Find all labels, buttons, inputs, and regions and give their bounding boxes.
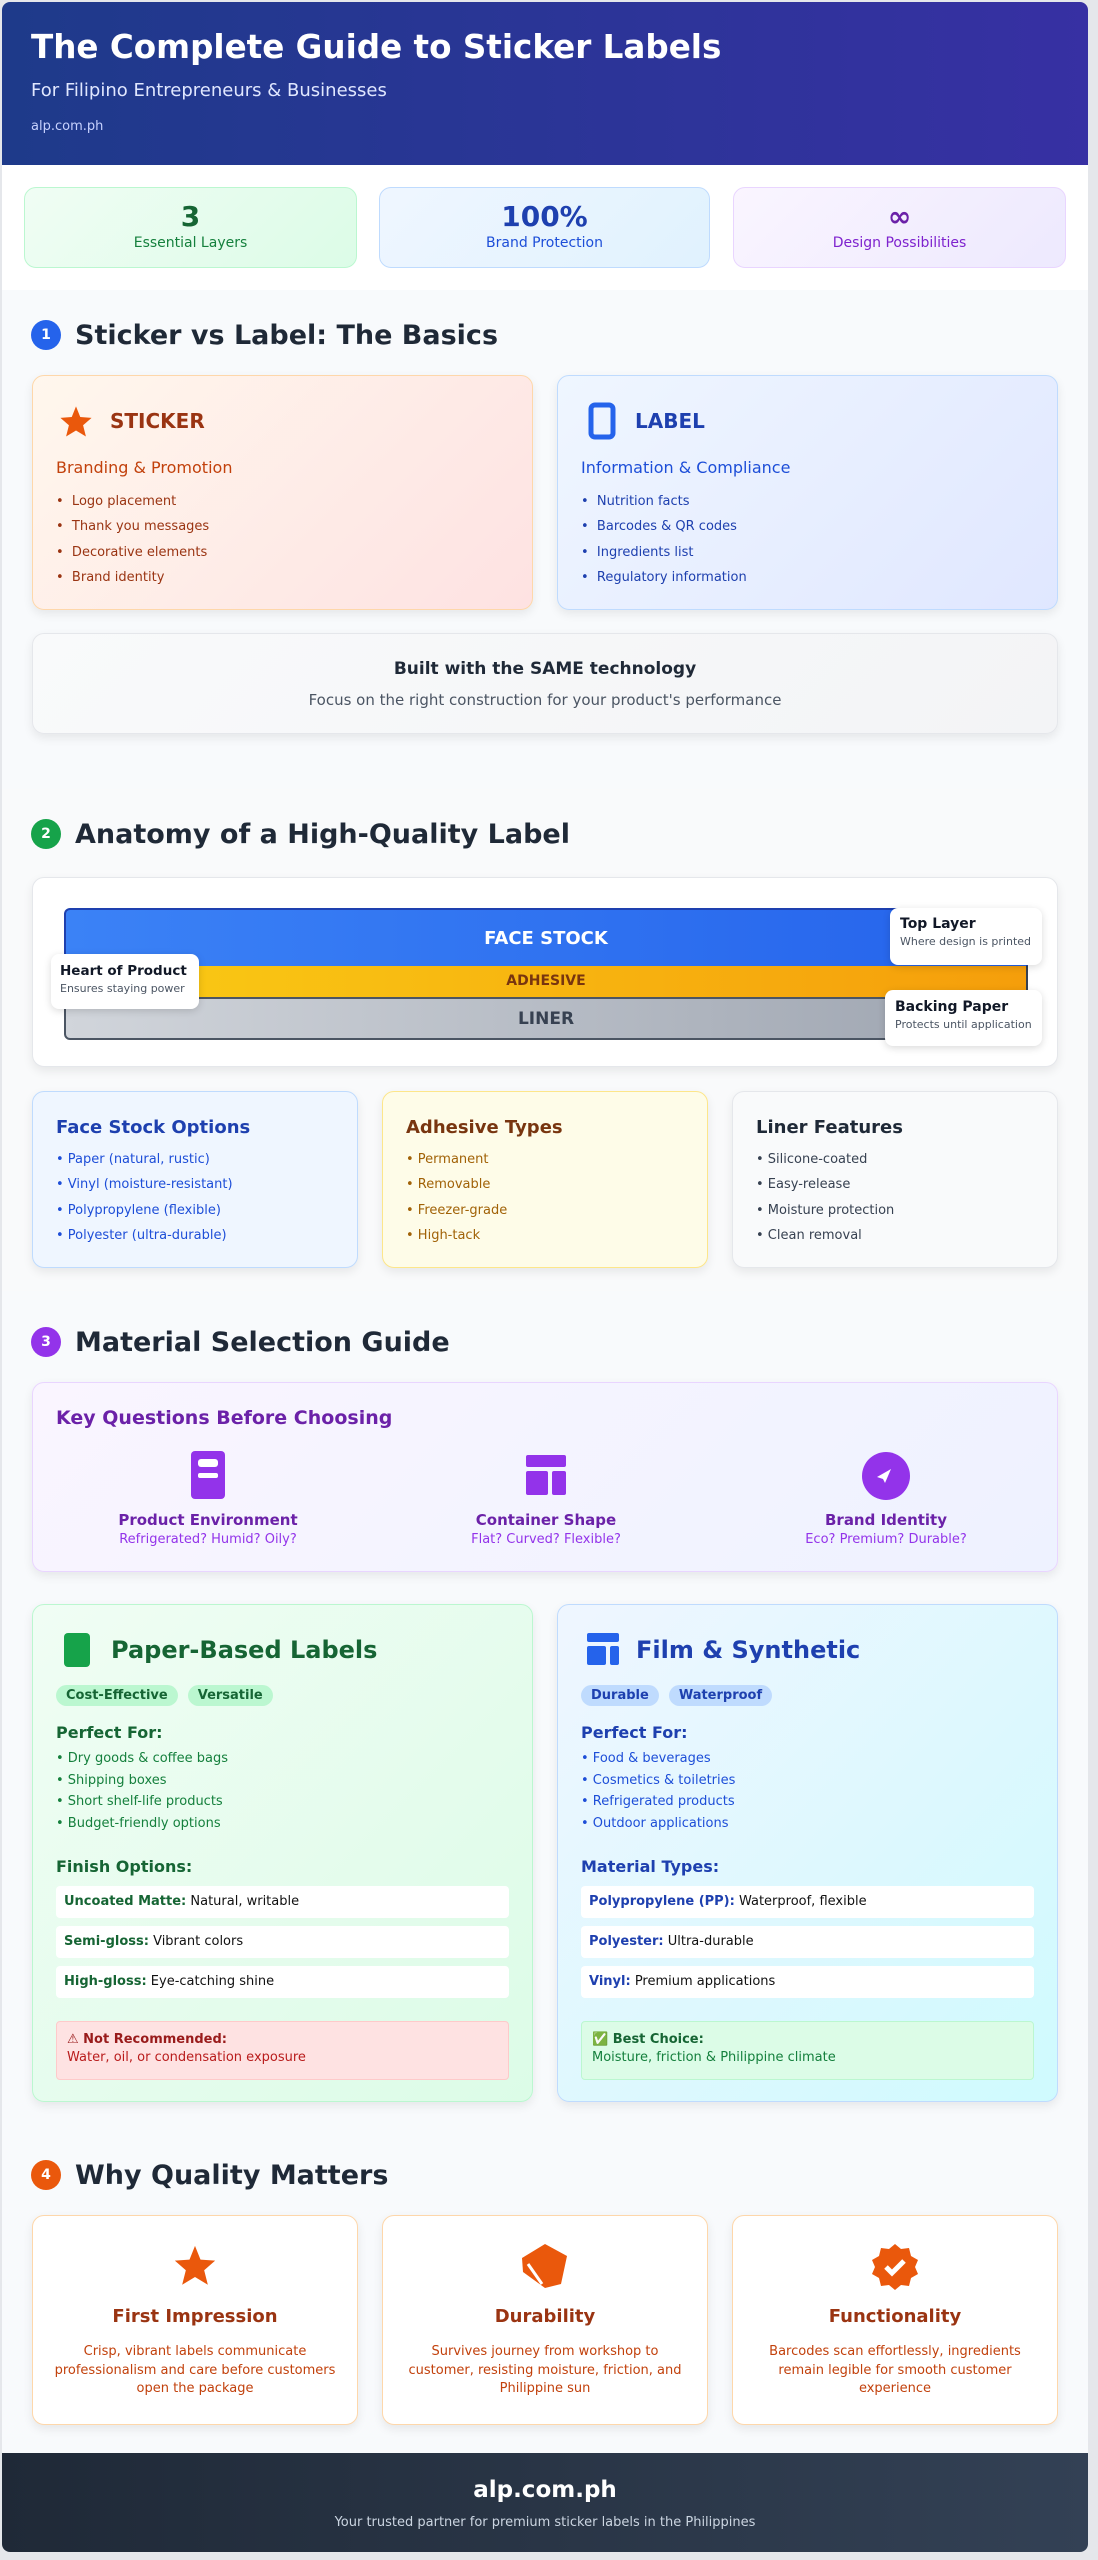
header	[2, 2, 1088, 165]
panel: functionality: Functionality	[829, 2306, 961, 2327]
panel: film & synthetic: • Cosmetics & toiletries	[581, 1773, 735, 1788]
panel: film & synthetic: Vinyl: Premium applications	[589, 1974, 775, 1989]
stat: brand protection: 100%	[501, 200, 588, 233]
panel: label	[557, 375, 1058, 610]
callout: same technology	[32, 633, 1058, 734]
panel: key questions: Key Questions Before Choosing	[56, 1407, 392, 1429]
panel: paper-based labels: Perfect For:	[56, 1723, 163, 1742]
callout: same technology: Built with the SAME technology	[394, 659, 696, 679]
stat: brand protection: Brand Protection	[486, 235, 603, 251]
section 1 heading: Sticker vs Label: The Basics	[75, 320, 498, 350]
panel: first impression: First Impression	[112, 2306, 278, 2327]
stats strip	[2, 165, 1088, 290]
section 2 band	[2, 789, 1088, 1291]
panel: film & synthetic: • Food & beverages	[581, 1751, 711, 1766]
callout: best choice: Moisture, friction & Philippine climate	[592, 2050, 836, 2065]
footer: Your trusted partner for premium sticker labels in the Philippines	[335, 2515, 755, 2530]
panel: face stock options: Face Stock Options	[56, 1117, 250, 1138]
panel: paper-based labels: High-gloss: Eye-catching shine	[64, 1974, 274, 1989]
callout: heart of product: Ensures staying power	[60, 982, 185, 995]
panel: paper-based labels: Semi-gloss: Vibrant colors	[64, 1934, 243, 1949]
item: brand identity	[805, 1452, 967, 1547]
panel: film & synthetic	[557, 1604, 1058, 2102]
panel: key questions	[32, 1382, 1058, 1572]
panel: sticker: • Thank you messages	[56, 519, 209, 534]
panel: durability: Durability	[495, 2306, 595, 2327]
panel: durability	[382, 2215, 708, 2425]
panel: paper-based labels: Cost-Effective	[66, 1688, 168, 1703]
panel: label: • Ingredients list	[581, 545, 694, 560]
panel: paper-based labels: Paper-Based Labels	[111, 1636, 377, 1664]
panel: first impression	[32, 2215, 358, 2425]
subtitle: For Filipino Entrepreneurs & Businesses	[31, 80, 387, 101]
item: container shape	[471, 1455, 621, 1547]
panel: film & synthetic: Polypropylene (PP): Waterproof, flexible	[589, 1894, 867, 1909]
item: brand identity: Brand Identity	[825, 1511, 947, 1529]
panel: label: • Barcodes & QR codes	[581, 519, 737, 534]
section 2 heading: Anatomy of a High-Quality Label	[75, 818, 570, 850]
stat: design: Design Possibilities	[833, 235, 966, 251]
panel: liner features: • Clean removal	[756, 1228, 862, 1243]
panel: paper-based labels: • Shipping boxes	[56, 1773, 167, 1788]
panel: adhesive types	[382, 1091, 708, 1268]
panel: face stock options	[32, 1091, 358, 1268]
title: The Complete Guide to Sticker Labels	[31, 28, 721, 66]
panel: paper-based labels	[32, 1604, 533, 2102]
panel: paper-based labels: • Budget-friendly options	[56, 1816, 221, 1831]
callout: top layer: Top Layer	[900, 916, 976, 932]
panel: liner features: • Silicone-coated	[756, 1152, 867, 1167]
panel: film & synthetic: Material Types:	[581, 1857, 719, 1876]
callout: best choice	[581, 2021, 1034, 2080]
layer: adhesive: ADHESIVE	[506, 973, 586, 989]
item: product environment	[118, 1451, 298, 1547]
panel: sticker: • Decorative elements	[56, 545, 207, 560]
panel: durability: Survives journey from workshop to customer, resisting moisture, friction, and Philippine sun	[408, 2344, 682, 2396]
footer	[2, 2453, 1088, 2552]
panel: paper-based labels: Versatile	[198, 1688, 263, 1703]
panel: film & synthetic: Film & Synthetic	[636, 1636, 860, 1664]
section 3 heading: Material Selection Guide	[75, 1326, 450, 1358]
panel: anatomy diagram	[32, 877, 1058, 1067]
domain: alp.com.ph	[31, 119, 103, 134]
panel: label: • Nutrition facts	[581, 494, 690, 509]
callout: backing paper	[885, 990, 1042, 1046]
section 2 heading: 2	[41, 826, 51, 842]
layer: face stock	[64, 908, 1028, 966]
panel: functionality	[732, 2215, 1058, 2425]
layer: liner: LINER	[518, 1009, 574, 1029]
callout: best choice: ✅ Best Choice:	[592, 2032, 704, 2047]
panel: sticker: Branding & Promotion	[56, 458, 232, 477]
panel: sticker: • Logo placement	[56, 494, 176, 509]
panel: face stock options: • Vinyl (moisture-resistant)	[56, 1177, 233, 1192]
panel: face stock options: • Polyester (ultra-durable)	[56, 1228, 227, 1243]
panel: label: Information & Compliance	[581, 458, 790, 477]
panel: film & synthetic: Polyester: Ultra-durable	[589, 1934, 754, 1949]
stat: layers: 3	[181, 200, 200, 233]
panel: liner features	[732, 1091, 1058, 1268]
section 3 heading: 3	[41, 1334, 51, 1350]
panel: adhesive types: • Removable	[406, 1177, 490, 1192]
panel: paper-based labels: Uncoated Matte: Natural, writable	[64, 1894, 299, 1909]
panel: sticker: STICKER	[110, 409, 205, 433]
panel: face stock options: • Paper (natural, rustic)	[56, 1152, 210, 1167]
stat: design	[733, 187, 1066, 268]
panel: label: LABEL	[635, 409, 705, 433]
panel: sticker	[32, 375, 533, 610]
section 1 heading: 1	[41, 327, 51, 343]
stat: brand protection	[379, 187, 710, 268]
callout: heart of product	[51, 954, 199, 1009]
panel: adhesive types: Adhesive Types	[406, 1117, 563, 1138]
stat: design: ∞	[888, 200, 911, 233]
panel: functionality: Barcodes scan effortlessly, ingredients remain legible for smooth customer experience	[769, 2344, 1021, 2396]
panel: liner features: • Easy-release	[756, 1177, 850, 1192]
panel: adhesive types: • Permanent	[406, 1152, 488, 1167]
footer: alp.com.ph	[473, 2477, 617, 2503]
callout: backing paper: Protects until application	[895, 1018, 1032, 1031]
panel: film & synthetic: Durable	[591, 1688, 649, 1703]
callout: same technology: Focus on the right construction for your product's performance	[309, 691, 781, 709]
stat: layers	[24, 187, 357, 268]
layer: liner	[64, 997, 1028, 1040]
panel: film & synthetic: Perfect For:	[581, 1723, 688, 1742]
panel: paper-based labels: Finish Options:	[56, 1857, 192, 1876]
callout: heart of product: Heart of Product	[60, 963, 187, 979]
panel: liner features: • Moisture protection	[756, 1203, 894, 1218]
callout: not recommended: ⚠ Not Recommended:	[67, 2032, 227, 2047]
icon: star	[60, 406, 92, 436]
panel: label: • Regulatory information	[581, 570, 747, 585]
panel: film & synthetic: Waterproof	[679, 1688, 762, 1703]
icon: layout	[587, 1633, 619, 1665]
callout: backing paper: Backing Paper	[895, 999, 1008, 1015]
callout: top layer	[890, 908, 1042, 965]
layer: face stock: FACE STOCK	[484, 928, 608, 949]
callout: top layer: Where design is printed	[900, 935, 1031, 948]
callout: not recommended	[56, 2021, 509, 2080]
item: container shape: Flat? Curved? Flexible?	[471, 1532, 621, 1547]
panel: film & synthetic: • Refrigerated products	[581, 1794, 735, 1809]
panel: face stock options: • Polypropylene (flexible)	[56, 1203, 221, 1218]
item: product environment: Product Environment	[118, 1511, 298, 1529]
layer: adhesive	[64, 966, 1028, 997]
panel: liner features: Liner Features	[756, 1117, 903, 1138]
panel: first impression: Crisp, vibrant labels communicate professionalism and care before customers open the package	[55, 2344, 335, 2396]
item: product environment: Refrigerated? Humid? Oily?	[119, 1532, 297, 1547]
callout: not recommended: Water, oil, or condensation exposure	[67, 2050, 306, 2065]
panel: paper-based labels: • Short shelf-life products	[56, 1794, 223, 1809]
panel: film & synthetic: • Outdoor applications	[581, 1816, 728, 1831]
item: brand identity: Eco? Premium? Durable?	[805, 1532, 967, 1547]
panel: sticker: • Brand identity	[56, 570, 164, 585]
stat: layers: Essential Layers	[134, 235, 247, 251]
icon: phone	[588, 402, 616, 440]
item: container shape: Container Shape	[476, 1511, 616, 1529]
icon: paper	[64, 1633, 90, 1667]
panel: paper-based labels: • Dry goods & coffee bags	[56, 1751, 228, 1766]
section 4 heading: Why Quality Matters	[75, 2160, 388, 2190]
panel: adhesive types: • Freezer-grade	[406, 1203, 507, 1218]
section 4 heading: 4	[41, 2167, 51, 2183]
panel: adhesive types: • High-tack	[406, 1228, 480, 1243]
